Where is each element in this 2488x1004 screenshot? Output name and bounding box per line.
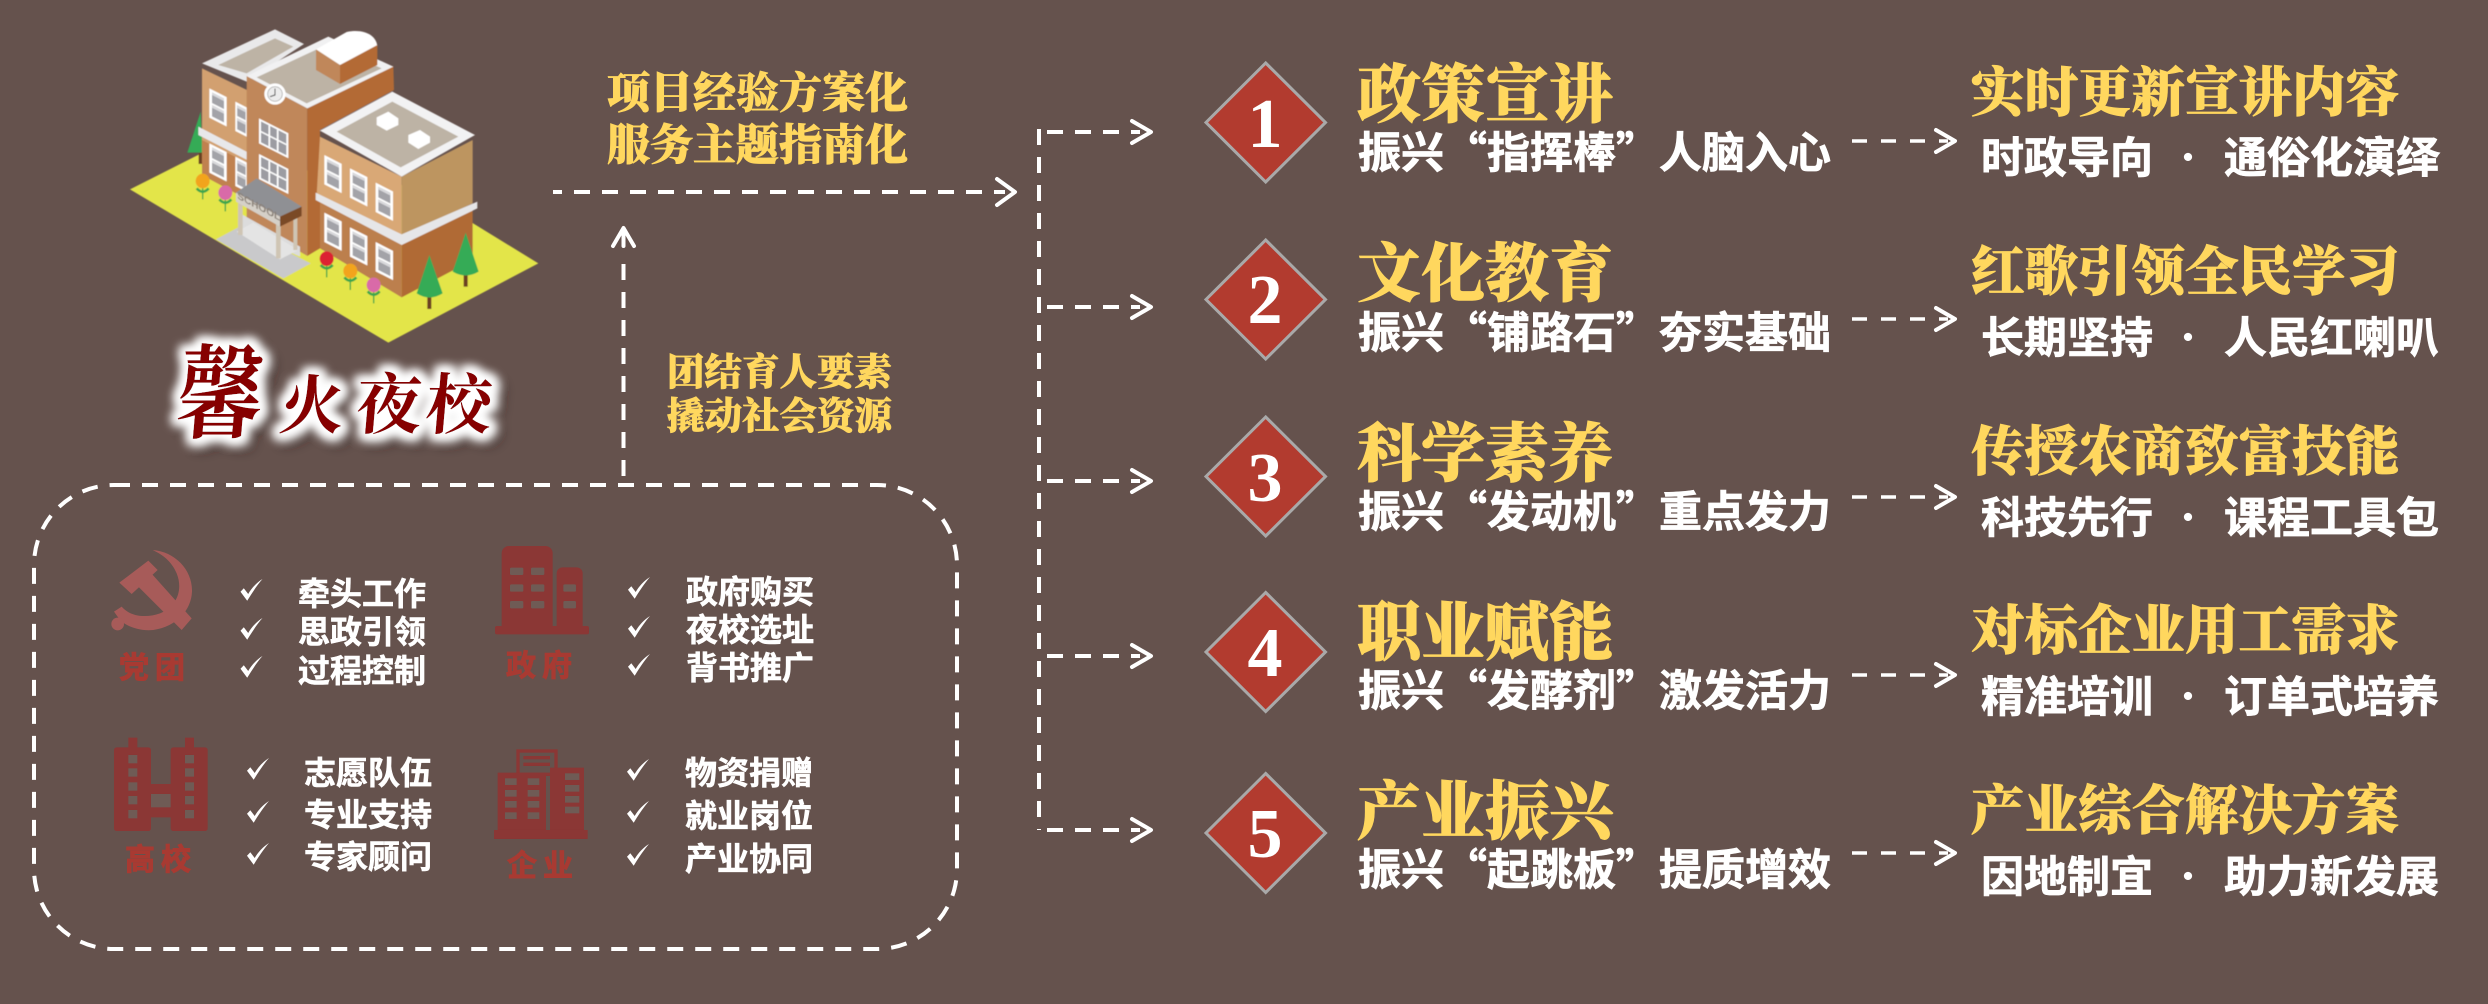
row 2: 文化教育: 人民红喇叭 <box>2224 304 2439 366</box>
row 1: 政策宣讲: 时政导向 <box>1981 124 2153 186</box>
label: 党团: 党团 <box>119 652 191 685</box>
arrow <box>1852 664 1955 686</box>
row 2: 文化教育 <box>1206 239 2439 366</box>
badge 3: 3 <box>1248 440 1282 517</box>
arrow <box>1852 842 1955 864</box>
row 4: 职业赋能: 订单式培养 <box>2224 663 2439 725</box>
row 3: 科学素养: 科技先行 <box>1981 484 2153 546</box>
row 4: 职业赋能: 对标企业用工需求 <box>1971 601 2399 661</box>
caption: 团结育人要素: 撬动社会资源 <box>667 396 895 438</box>
list: party roles: 过程控制 <box>298 653 426 689</box>
row 3: 科学素养: 振兴“发动机”重点发力 <box>1358 478 1831 540</box>
panel: partner resources dashed box <box>34 485 957 949</box>
row 5: 产业振兴: 产业综合解决方案 <box>1971 781 2399 841</box>
badge 2 <box>1206 240 1326 359</box>
caption: 项目经验方案化 <box>607 69 908 170</box>
right wing <box>316 92 477 297</box>
badge 1: 1 <box>1248 86 1282 163</box>
arrow <box>1852 130 1955 152</box>
arrow: partners up to school <box>613 228 634 476</box>
row 5: 产业振兴: 产业振兴 <box>1357 777 1619 848</box>
row 2: 文化教育: 红歌引领全民学习 <box>1971 242 2399 302</box>
icon: enterprise building <box>494 751 588 839</box>
row 5: 产业振兴: 振兴“起跳板”提质增效 <box>1358 836 1831 898</box>
row 2: 文化教育: 振兴“铺路石”夯实基础 <box>1358 299 1831 361</box>
row 1: 政策宣讲: 实时更新宣讲内容 <box>1971 63 2399 123</box>
badge 4: 4 <box>1248 615 1282 692</box>
row 5: 产业振兴: 因地制宜 <box>1981 843 2153 905</box>
badge 5 <box>1206 774 1326 892</box>
row 1: 政策宣讲: 振兴“指挥棒”人脑入心 <box>1358 119 1831 181</box>
list: university roles: 专业支持 <box>304 797 432 833</box>
list: university roles: 专家顾问 <box>304 839 432 875</box>
list: party roles <box>240 576 426 689</box>
caption: 团结育人要素 <box>667 352 895 438</box>
rear tree <box>187 112 203 164</box>
badge 4 <box>1206 592 1326 712</box>
list: enterprise roles <box>627 755 813 877</box>
list: party roles: 牵头工作 <box>298 576 426 612</box>
icon: party emblem <box>111 550 192 630</box>
badge 3 <box>1206 417 1326 536</box>
row 4: 职业赋能: · <box>2172 672 2204 718</box>
list: enterprise roles: 就业岗位 <box>685 798 813 834</box>
caption: 项目经验方案化: 服务主题指南化 <box>607 121 908 170</box>
list: government roles: 政府购买 <box>686 574 814 610</box>
row 5: 产业振兴: · <box>2172 852 2204 898</box>
badge 5: 5 <box>1248 796 1282 873</box>
list: government roles: 夜校选址 <box>686 612 814 648</box>
list: enterprise roles: 产业协同 <box>685 841 813 877</box>
row 3: 科学素养: 科学素养 <box>1357 419 1613 490</box>
row 1: 政策宣讲: · <box>2172 133 2204 179</box>
caption: 团结育人要素: 团结育人要素 <box>667 352 893 394</box>
list: university roles: 志愿队伍 <box>304 755 432 791</box>
row 3: 科学素养: 课程工具包 <box>2224 484 2439 546</box>
list: enterprise roles: 物资捐赠 <box>685 755 813 791</box>
left wing <box>198 29 304 200</box>
list: party roles: 思政引领 <box>298 614 426 650</box>
row 1: 政策宣讲: 政策宣讲 <box>1357 60 1613 131</box>
caption: 项目经验方案化: 项目经验方案化 <box>607 69 908 118</box>
title: 馨火夜校: 校 <box>422 352 502 447</box>
row 4: 职业赋能 <box>1206 592 2439 725</box>
clock <box>264 83 286 105</box>
title: 馨火夜校 <box>171 314 502 460</box>
label: 政府: 政府 <box>506 650 578 683</box>
arrow: school to trunk <box>553 179 1015 205</box>
arrow: distribution trunk <box>1039 121 1151 841</box>
flowers <box>196 174 381 303</box>
icon: school building illustration <box>130 29 538 343</box>
label: 高校: 高校 <box>125 844 197 877</box>
roof box <box>316 31 377 84</box>
badge 1 <box>1206 63 1326 182</box>
trees <box>417 233 479 309</box>
list: government roles <box>628 574 814 686</box>
icon: government building <box>495 546 589 634</box>
row 4: 职业赋能: 振兴“发酵剂”激发活力 <box>1358 657 1831 719</box>
row 5: 产业振兴: 助力新发展 <box>2224 843 2439 905</box>
label: 企业: 企业 <box>507 850 579 883</box>
row 2: 文化教育: 文化教育 <box>1357 239 1613 310</box>
row 3: 科学素养 <box>1206 417 2439 546</box>
central tower <box>247 37 394 256</box>
row 3: 科学素养: · <box>2172 493 2204 539</box>
yellow lawn <box>130 154 538 343</box>
title: 馨火夜校: 馨 <box>171 314 271 460</box>
arrow <box>1852 486 1955 508</box>
row 3: 科学素养: 传授农商致富技能 <box>1971 422 2399 482</box>
icon: university towers <box>114 738 208 831</box>
title: 馨火夜校: 夜 <box>352 352 427 447</box>
arrow <box>1852 308 1955 330</box>
entrance portico <box>216 178 311 278</box>
badge 2: 2 <box>1248 262 1282 339</box>
list: government roles: 背书推广 <box>686 650 814 686</box>
title: 馨火夜校: 火 <box>276 355 348 447</box>
row 2: 文化教育: · <box>2172 313 2204 359</box>
row 1: 政策宣讲: 通俗化演绎 <box>2224 124 2440 186</box>
row 4: 职业赋能: 精准培训 <box>1981 663 2153 725</box>
list: university roles <box>247 755 432 875</box>
row 2: 文化教育: 长期坚持 <box>1981 304 2153 366</box>
entrance portico: SCHOOL <box>237 190 281 224</box>
row 4: 职业赋能: 职业赋能 <box>1357 598 1613 669</box>
row 1: 政策宣讲 <box>1206 60 2440 186</box>
row 5: 产业振兴 <box>1206 774 2439 905</box>
